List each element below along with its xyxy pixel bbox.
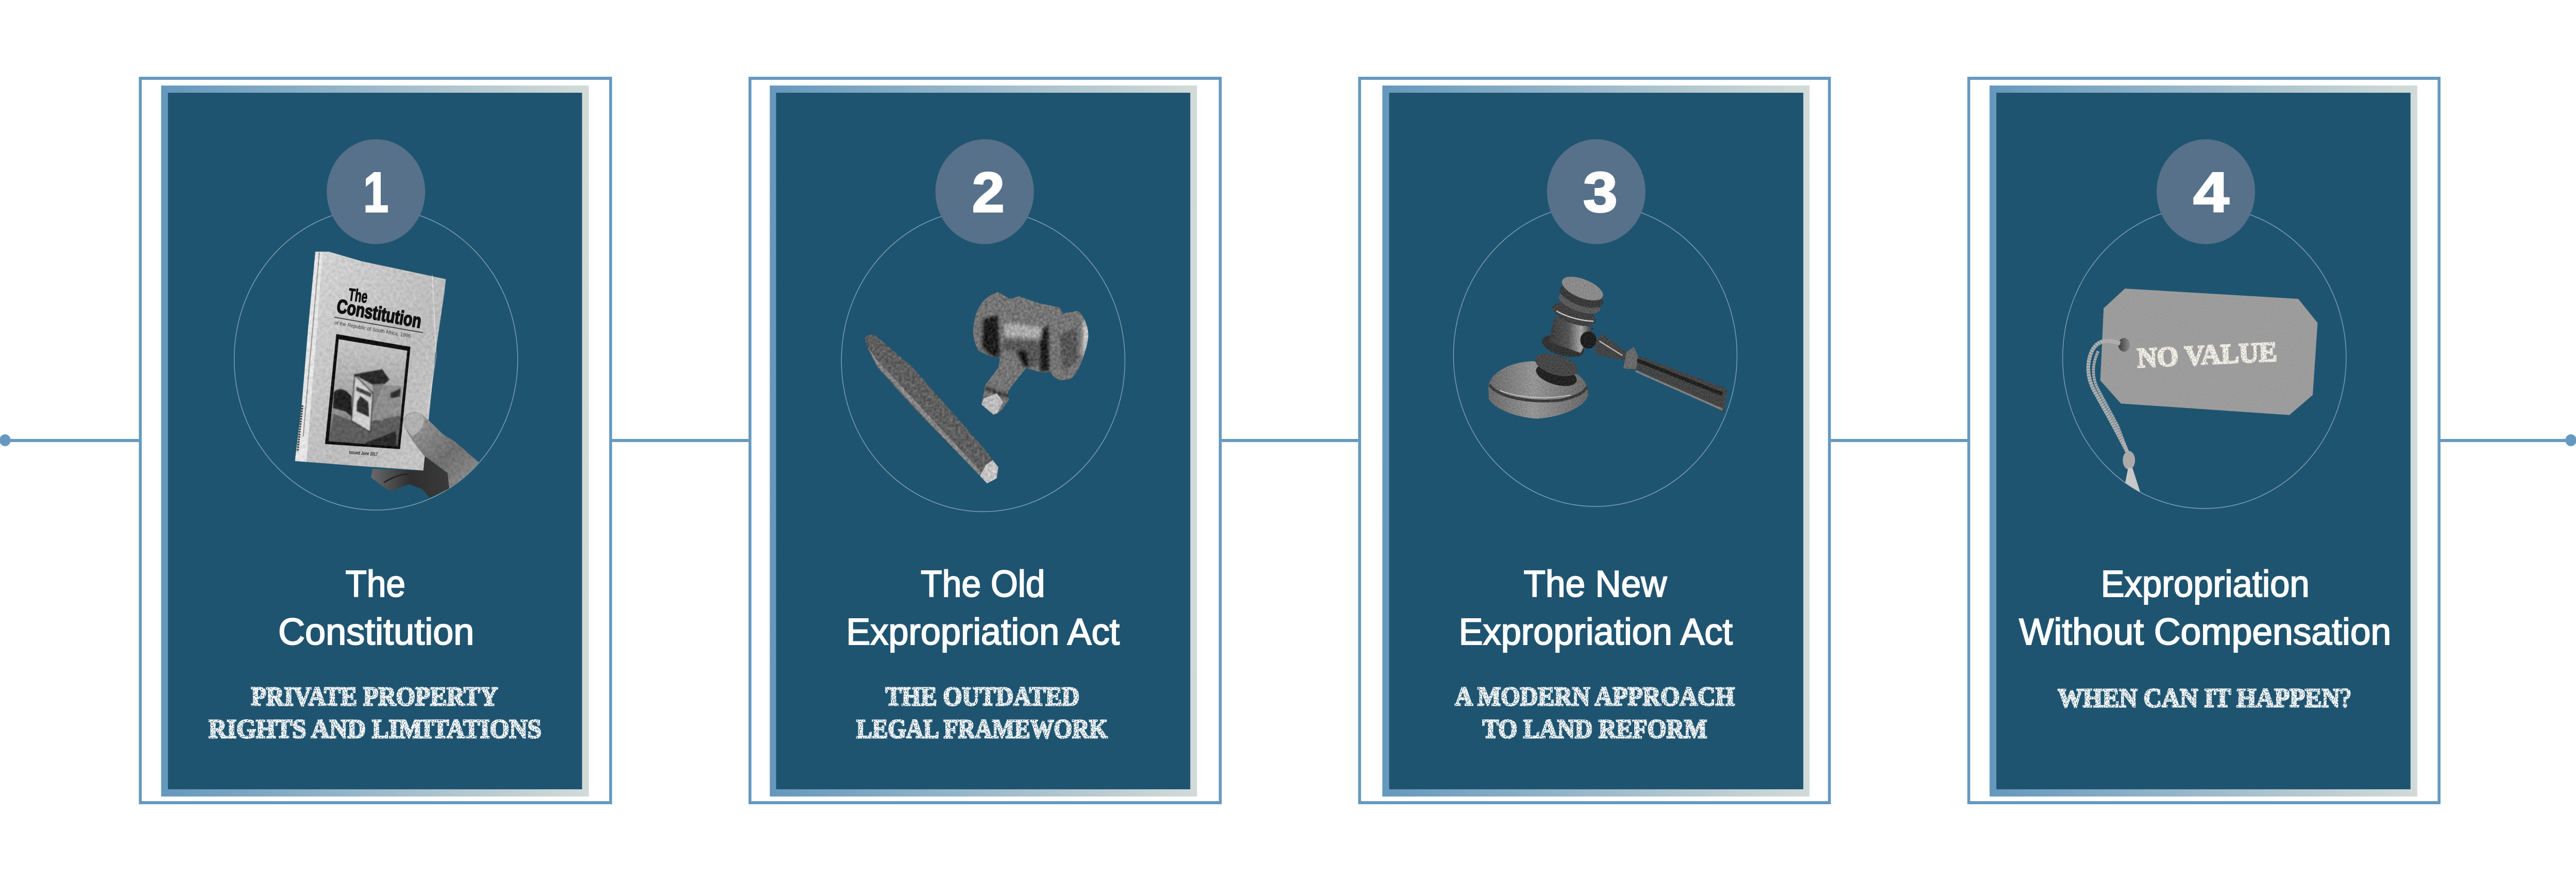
number badge: 4: [2157, 139, 2255, 244]
number badge: 3: [1547, 139, 1646, 244]
subheading: private property rights and limitations: RIGHTS AND LIMITATIONS: [209, 714, 541, 743]
heading: the constitution: The: [346, 563, 405, 604]
heading: the old expropriation act: The Old: [921, 563, 1045, 604]
timeline connector: [0, 434, 2576, 446]
subheading: the outdated legal framework: THE OUTDATED: [886, 682, 1079, 711]
heading: expropriation without compensation: Expropriation: [2101, 563, 2310, 604]
heading: the new expropriation act: [1459, 563, 1733, 652]
icon: hand holding constitution booklet: of the Republic of South Africa, 1996: [334, 320, 411, 340]
number badge: 4: 4: [2193, 160, 2229, 224]
number badge: 2: [936, 139, 1034, 244]
subheading: a modern approach to land reform: A MODERN APPROACH: [1455, 682, 1735, 711]
frame: step 2 outer outline: [750, 78, 1221, 803]
heading: the new expropriation act: Expropriation Act: [1459, 611, 1733, 652]
panel: step 4 expropriation without compensation: [1969, 78, 2439, 803]
subheading: when can it happen: WHEN CAN IT HAPPEN?: [2058, 683, 2351, 713]
subheading: private property rights and limitations: [209, 682, 541, 743]
card: step 1 dark background: [168, 93, 582, 789]
heading: the new expropriation act: The New: [1523, 563, 1667, 604]
subheading: the outdated legal framework: [856, 682, 1108, 743]
outline circle: step 2: [841, 210, 1125, 512]
heading: the constitution: Constitution: [278, 611, 474, 652]
subheading: the outdated legal framework: LEGAL FRAMEWORK: [856, 714, 1108, 743]
gradient edge: step 1: [161, 86, 589, 797]
icon: hand holding constitution booklet: The: [347, 285, 369, 307]
gradient edge: step 2: [770, 86, 1197, 797]
gradient edge: step 4: [1990, 86, 2417, 797]
panel: step 1 the constitution: [140, 78, 611, 803]
panel: step 3 the new expropriation act: [1360, 78, 1829, 803]
icon: hand holding constitution booklet: Issued June 2017: [349, 449, 378, 457]
icon: modern gavel on sound block: [1488, 272, 1727, 419]
subheading: a modern approach to land reform: TO LAND REFORM: [1483, 714, 1707, 743]
frame: step 4 outer outline: [1969, 78, 2439, 803]
number badge: 2: 2: [972, 160, 1005, 224]
outline circle: step 1: [234, 208, 518, 510]
heading: the constitution: [278, 563, 474, 652]
frame: step 3 outer outline: [1360, 78, 1829, 803]
outline circle: step 4: [2063, 207, 2346, 509]
icon: no value price tag: [2088, 289, 2317, 495]
icon: hand holding constitution booklet: [295, 251, 490, 500]
heading: expropriation without compensation: Without Compensation: [2019, 611, 2391, 652]
subheading: private property rights and limitations: PRIVATE PROPERTY: [251, 682, 498, 711]
card: step 3 dark background: [1389, 93, 1803, 789]
number badge: 1: 1: [363, 160, 388, 224]
tag label: NO VALUE: [2137, 336, 2278, 374]
heading: the old expropriation act: [846, 563, 1120, 652]
number badge: 1: [327, 139, 425, 244]
heading: expropriation without compensation: [2019, 563, 2391, 652]
frame: step 1 outer outline: [140, 78, 611, 803]
card: step 2 dark background: [776, 93, 1190, 789]
gradient edge: step 3: [1382, 86, 1809, 797]
card: step 4 dark background: [1996, 93, 2411, 789]
icon: hand holding constitution booklet: Constitution: [335, 295, 423, 332]
number badge: 3: 3: [1583, 160, 1618, 224]
icon: broken old gavel: [865, 292, 1090, 483]
outline circle: step 3: [1453, 205, 1737, 506]
panel: step 2 the old expropriation act: [750, 78, 1221, 803]
subheading: a modern approach to land reform: [1455, 682, 1735, 743]
heading: the old expropriation act: Expropriation Act: [846, 611, 1120, 652]
